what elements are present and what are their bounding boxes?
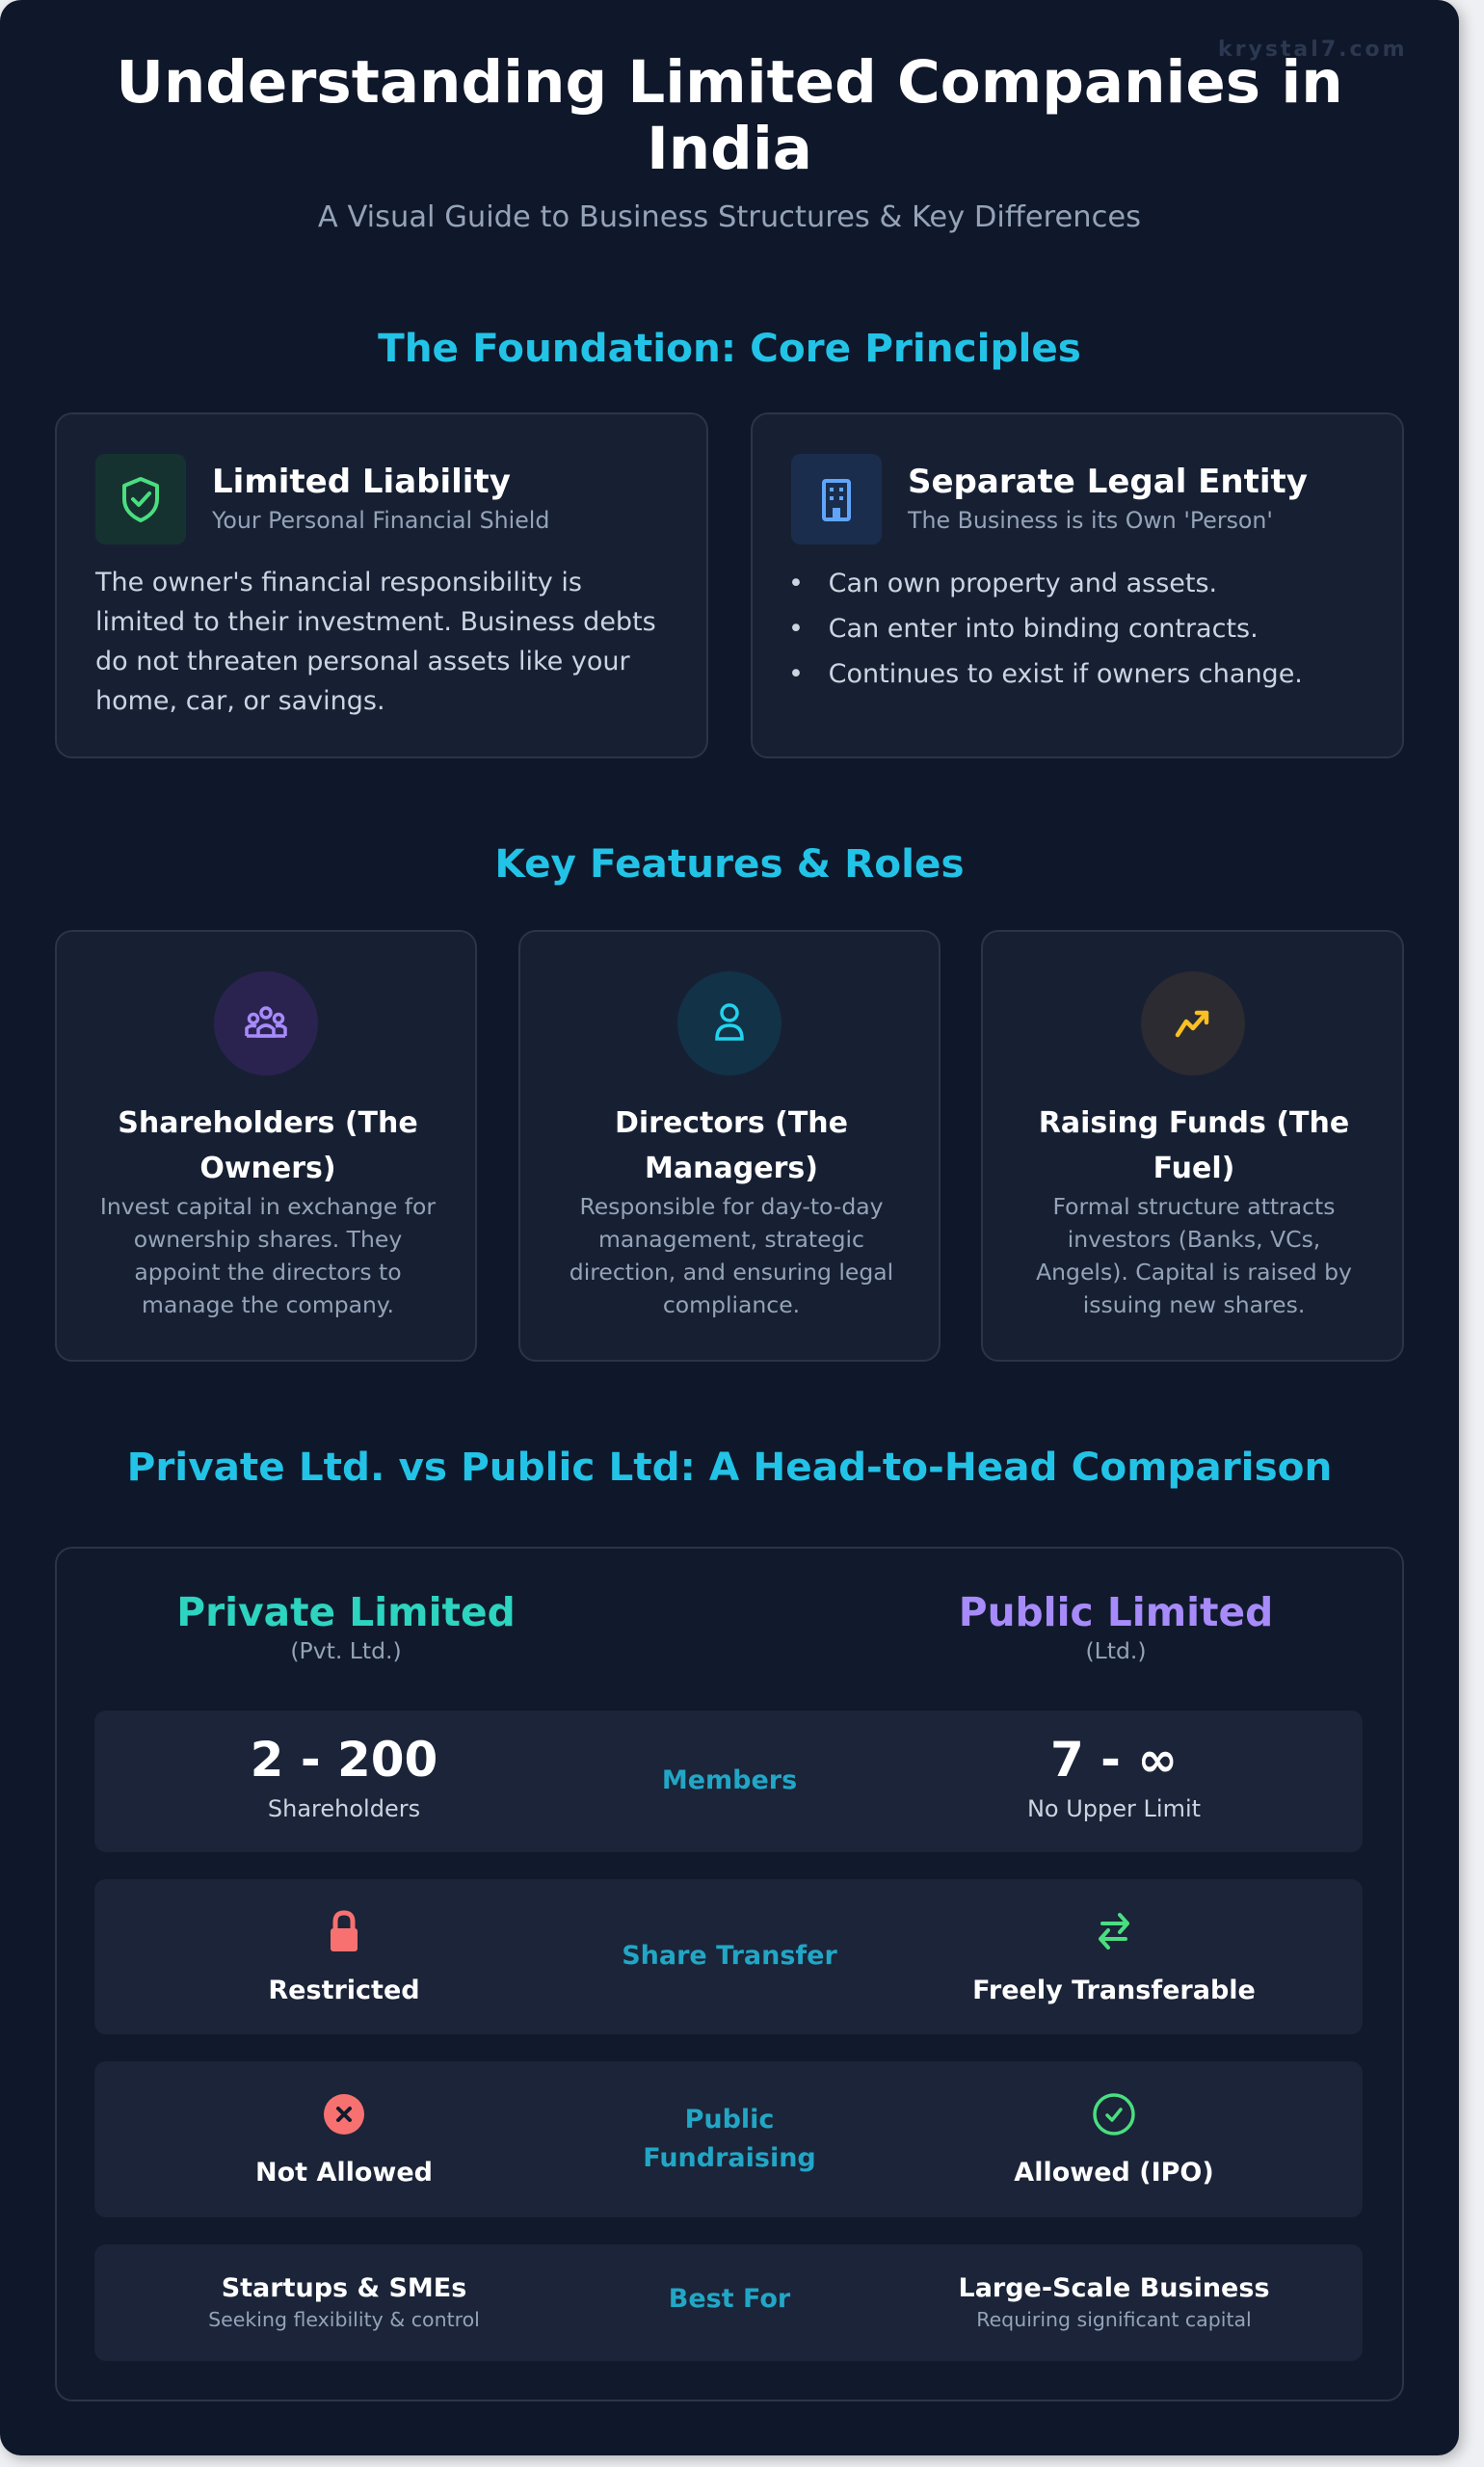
- text: Responsible for day-to-day management, strategic direction, and ensuring legal compliance.: [570, 1193, 893, 1318]
- private: startups: Startups & SMEs: [222, 2273, 466, 2303]
- bullet list: • Continues to exist if owners change.: [788, 659, 1303, 689]
- label: Public Fundraising: [643, 2105, 816, 2173]
- header: public: [959, 1589, 1273, 1664]
- panel: raising funds: [981, 930, 1404, 1362]
- row: share transfer: [94, 1879, 1363, 2034]
- row: members: [94, 1711, 1363, 1852]
- private: not allowed: [255, 2094, 433, 2188]
- private: not allowed: Not Allowed: [255, 2158, 433, 2188]
- row: public fundraising: [94, 2061, 1363, 2217]
- private: startups: [208, 2273, 480, 2331]
- panel: limited liability: [55, 412, 708, 758]
- header: public: (Ltd.): [1085, 1637, 1147, 1664]
- header: private: Private Limited: [176, 1589, 516, 1635]
- label: Members: [662, 1765, 797, 1795]
- text: Formal structure attracts investors (Banks, VCs, Angels). Capital is raised by issuing new shares.: [1036, 1193, 1352, 1318]
- title: Raising Funds (The Fuel): [1039, 1106, 1349, 1185]
- row: best for: [94, 2244, 1363, 2361]
- public: large-scale: Requiring significant capital: [976, 2308, 1252, 2331]
- heading: foundation: The Foundation: Core Principles: [378, 325, 1081, 371]
- private: restricted: Restricted: [268, 1976, 420, 2005]
- public: large-scale: Large-Scale Business: [958, 2273, 1270, 2303]
- header: private: (Pvt. Ltd.): [290, 1637, 402, 1664]
- label: Share Transfer: [622, 1941, 837, 1971]
- bullet list: • Can own property and assets.: [788, 569, 1217, 598]
- public value: [1027, 1732, 1201, 1822]
- panel: separate legal entity: [751, 412, 1404, 758]
- heading: Limited Liability: [212, 463, 511, 501]
- public: allowed: Allowed (IPO): [1014, 2158, 1214, 2188]
- header: private: [176, 1589, 516, 1664]
- title: Shareholders (The Owners): [118, 1106, 418, 1185]
- public value: No Upper Limit: [1027, 1795, 1201, 1822]
- private value: 2 - 200: [251, 1732, 437, 1788]
- public: freely transferable: Freely Transferable: [972, 1976, 1256, 2005]
- text: The owner's financial responsibility is limited to their investment. Business debts do not threaten personal assets like your home, car, or savings.: [95, 568, 656, 716]
- icon: group: [214, 971, 318, 1075]
- panel: directors: [518, 930, 941, 1362]
- bullet list: • Can enter into binding contracts.: [788, 614, 1259, 644]
- watermark: krystal7.com: [1218, 38, 1408, 62]
- heading: comparison: Private Ltd. vs Public Ltd: A Head-to-Head Comparison: [127, 1444, 1332, 1490]
- private value: Shareholders: [268, 1795, 420, 1822]
- subtitle: A Visual Guide to Business Structures & Key Differences: [318, 200, 1141, 234]
- title: Understanding Limited Companies in India: [116, 48, 1343, 183]
- header: public: Public Limited: [959, 1589, 1273, 1635]
- label: Best For: [669, 2284, 790, 2314]
- public: freely transferable: [972, 1912, 1256, 2005]
- icon: x circle: [324, 2094, 364, 2135]
- public value: 7 - ∞: [1050, 1732, 1178, 1788]
- private: startups: Seeking flexibility & control: [208, 2308, 480, 2331]
- public: large-scale: [958, 2273, 1270, 2331]
- icon: building: [791, 454, 882, 544]
- icon: lock: [331, 1910, 358, 1951]
- public: allowed: [1014, 2093, 1214, 2188]
- subheading: Your Personal Financial Shield: [212, 507, 549, 534]
- private value: [251, 1732, 437, 1822]
- text: Invest capital in exchange for ownership shares. They appoint the directors to manage the company.: [100, 1193, 436, 1318]
- title: Directors (The Managers): [615, 1106, 848, 1185]
- heading: key features: Key Features & Roles: [494, 840, 965, 887]
- subheading: The Business is its Own 'Person': [908, 507, 1273, 534]
- icon: trend: [1141, 971, 1245, 1075]
- panel: shareholders: [55, 930, 477, 1362]
- bullet list: [788, 569, 1303, 689]
- panel: comparison: [55, 1547, 1404, 2401]
- private: restricted: [268, 1910, 420, 2005]
- heading: Separate Legal Entity: [908, 463, 1308, 501]
- icon: shield: [95, 454, 186, 544]
- icon: check circle: [1093, 2093, 1135, 2135]
- icon: arrows: [1099, 1912, 1129, 1950]
- icon: person: [677, 971, 782, 1075]
